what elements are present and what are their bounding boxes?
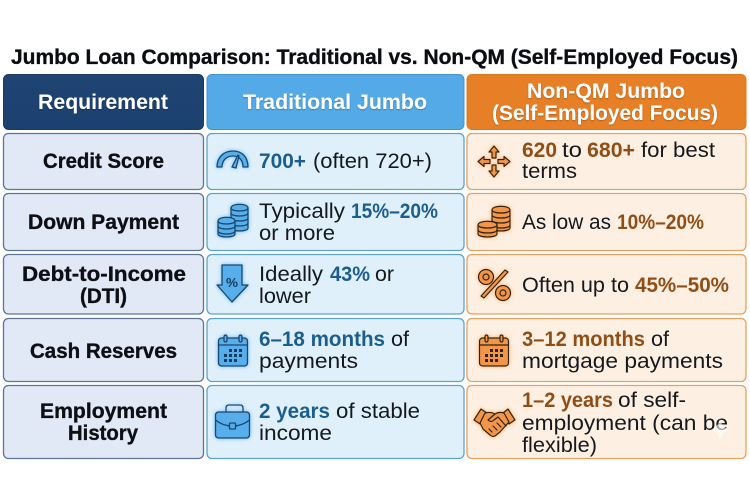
icon: calendar bbox=[480, 335, 508, 366]
text: 3-12 months: 3–12 months bbox=[522, 328, 645, 351]
text: 15%-20% bbox=[259, 200, 438, 245]
text: 1-2 years: employment (can be bbox=[522, 412, 728, 435]
text: 6-18 months: of bbox=[391, 328, 409, 351]
text: 2 years: income bbox=[259, 422, 332, 445]
text: 43% bbox=[259, 263, 394, 308]
text: 700+: (often 720+) bbox=[313, 150, 432, 173]
text: 620 to 680+ bbox=[522, 139, 715, 183]
text: 10%-20%: As low as bbox=[522, 211, 611, 234]
icon: coin stacks bbox=[218, 204, 248, 237]
icon: gauge bbox=[217, 151, 248, 168]
icon: briefcase bbox=[216, 405, 250, 438]
header: Requirement bbox=[4, 74, 204, 130]
text: 10%-20%: 10%–20% bbox=[617, 211, 704, 234]
header: Traditional Jumbo: Traditional Jumbo bbox=[243, 91, 427, 114]
requirement: Down Payment bbox=[4, 194, 204, 250]
requirement: Employment History bbox=[4, 386, 204, 458]
icon: four arrows bbox=[478, 146, 510, 177]
text: 45%-50% bbox=[522, 274, 729, 297]
requirement: Employment History: Employment bbox=[40, 400, 167, 423]
row: Cash Reserves bbox=[4, 318, 746, 382]
header: Non-QM Jumbo: Non-QM Jumbo bbox=[527, 80, 685, 103]
requirement: Employment History: History bbox=[68, 422, 138, 445]
requirement: Credit Score bbox=[4, 134, 204, 190]
text: 6-18 months: 6–18 months bbox=[259, 328, 385, 351]
row: Credit Score bbox=[4, 134, 746, 190]
text: 6-18 months: payments bbox=[259, 350, 358, 373]
traditional: Down Payment bbox=[207, 194, 464, 250]
text: 45%-50%: 45%–50% bbox=[635, 274, 729, 297]
icon: down arrow with percent bbox=[217, 265, 248, 302]
watermark sparkle bbox=[710, 418, 730, 441]
text: 43%: Ideally bbox=[259, 263, 324, 286]
text: 620 to 680+: to bbox=[562, 139, 582, 162]
text: 2 years bbox=[259, 400, 420, 445]
text: 700+: 700+ bbox=[259, 150, 306, 173]
header: Traditional Jumbo bbox=[207, 74, 464, 130]
header: Requirement: Requirement bbox=[38, 91, 168, 114]
text: 43%: or bbox=[375, 263, 394, 286]
text: 2 years: of stable bbox=[336, 400, 420, 423]
non-QM: Employment History bbox=[467, 386, 746, 458]
text: 1-2 years: 1–2 years bbox=[522, 389, 613, 412]
traditional: DTI bbox=[207, 254, 464, 314]
header: Non-QM Jumbo: (Self-Employed Focus) bbox=[492, 102, 718, 125]
text: 620 to 680+: terms bbox=[522, 160, 577, 183]
text: 6-18 months bbox=[259, 328, 409, 373]
title: Jumbo Loan Comparison: Traditional vs. Non-QM (Self-Employed Focus) bbox=[11, 45, 738, 69]
row: Down Payment bbox=[4, 194, 746, 250]
icon: calendar bbox=[218, 335, 248, 366]
traditional: Cash Reserves bbox=[207, 318, 464, 382]
non-QM: DTI bbox=[467, 254, 746, 314]
requirement: Cash Reserves bbox=[4, 318, 204, 382]
requirement: DTI: (DTI) bbox=[80, 285, 127, 308]
requirement: DTI: Debt-to-Income bbox=[22, 263, 186, 286]
text: 3-12 months: of bbox=[651, 328, 669, 351]
text: 620 to 680+: 680+ bbox=[587, 139, 635, 162]
requirement: DTI bbox=[4, 254, 204, 314]
text: 1-2 years: flexible) bbox=[522, 434, 597, 457]
header: Non-QM Jumbo bbox=[467, 74, 746, 130]
text: 1-2 years bbox=[522, 389, 728, 457]
row: Employment History bbox=[4, 386, 746, 458]
text: 700+ bbox=[259, 150, 432, 173]
requirement: Cash Reserves: Cash Reserves bbox=[30, 340, 177, 363]
text: 3-12 months: mortgage payments bbox=[522, 350, 723, 373]
text: 620 to 680+: for best bbox=[641, 139, 715, 162]
text: 45%-50%: Often up to bbox=[522, 274, 629, 297]
text: 43%: lower bbox=[259, 285, 311, 308]
text: 15%-20%: 15%–20% bbox=[351, 200, 438, 223]
traditional: Credit Score bbox=[207, 134, 464, 190]
icon: down arrow with percent: % bbox=[226, 275, 238, 290]
row: Debt-to-Income bbox=[4, 254, 746, 314]
text: 10%-20% bbox=[522, 211, 704, 234]
icon: handshake bbox=[474, 409, 515, 436]
text: 43%: 43% bbox=[330, 263, 370, 286]
non-QM: Credit Score bbox=[467, 134, 746, 190]
icon: percent sign bbox=[478, 270, 510, 300]
icon: coin stacks bbox=[478, 206, 510, 237]
text: 3-12 months bbox=[522, 328, 723, 373]
text: 620 to 680+: 620 bbox=[522, 139, 557, 162]
text: 1-2 years: of self- bbox=[618, 389, 686, 412]
text: 2 years: 2 years bbox=[259, 400, 330, 423]
text: 15%-20%: Typically bbox=[259, 200, 346, 223]
non-QM: Down Payment bbox=[467, 194, 746, 250]
requirement: Down Payment: Down Payment bbox=[28, 211, 179, 234]
text: 15%-20%: or more bbox=[259, 222, 335, 245]
traditional: Employment History bbox=[207, 386, 464, 458]
non-QM: Cash Reserves bbox=[467, 318, 746, 382]
requirement: Credit Score: Credit Score bbox=[43, 150, 164, 173]
